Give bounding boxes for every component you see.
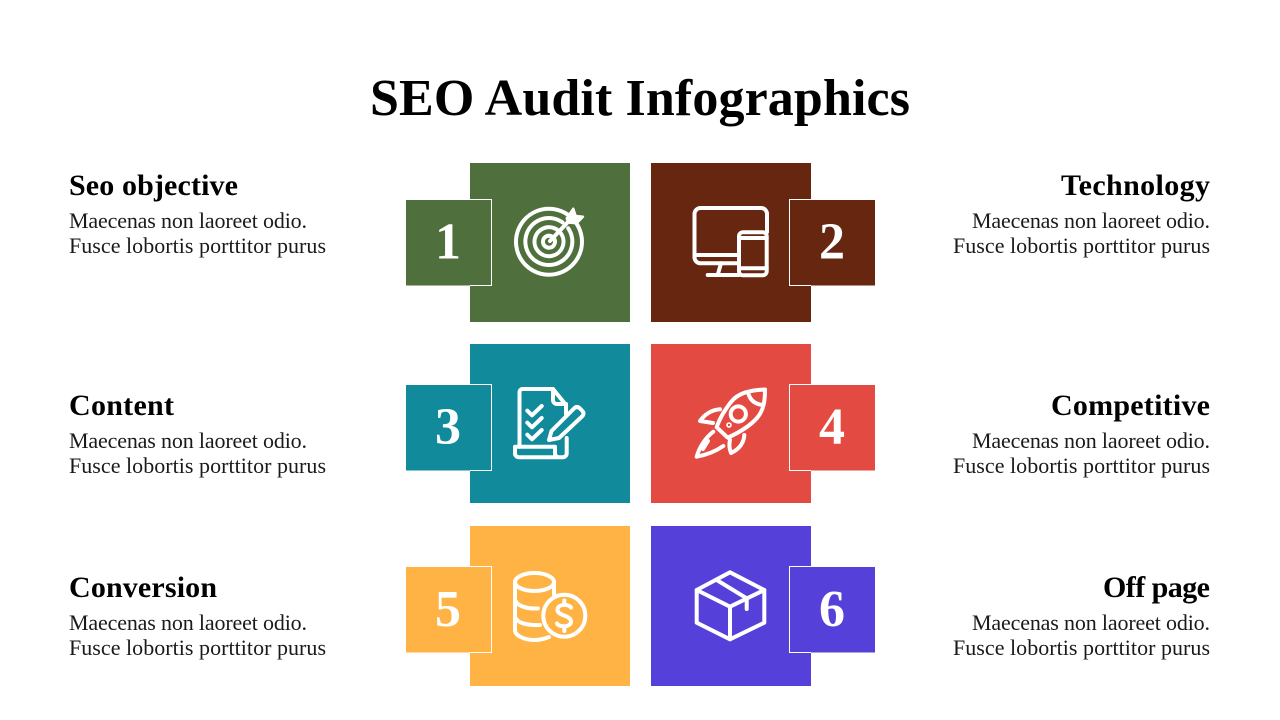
panel: 6 purple tile: [651, 526, 875, 686]
icon: package box: [697, 572, 764, 639]
text block: Off page: Fusce lobortis porttitor purus: [953, 635, 1210, 660]
text block: Off page: Maecenas non laoreet odio.: [972, 610, 1210, 635]
text block: Content: [69, 389, 326, 478]
icon: monitor and phone: [694, 208, 767, 275]
icon: coin stack with dollar: [515, 573, 585, 640]
text block: Content: Fusce lobortis porttitor purus: [69, 453, 326, 478]
text block: Content: Content: [69, 389, 174, 422]
text block: Content: Maecenas non laoreet odio.: [69, 428, 307, 453]
text block: Competitive: Maecenas non laoreet odio.: [972, 428, 1210, 453]
text block: Technology: Technology: [1061, 169, 1210, 202]
panel: 2 brown tile: 2: [819, 214, 845, 270]
text block: Conversion: Fusce lobortis porttitor purus: [69, 635, 326, 660]
panel: 3 teal tile: [406, 344, 630, 503]
text block: Seo objective: Maecenas non laoreet odio.: [69, 208, 307, 233]
panel: 1 green tile: 1: [435, 214, 461, 270]
title: SEO Audit Infographics: [370, 70, 910, 127]
text block: Conversion: [69, 571, 326, 660]
panel: 5 yellow tile: [406, 526, 630, 686]
text block: Seo objective: Seo objective: [69, 169, 238, 202]
text block: Conversion: Maecenas non laoreet odio.: [69, 610, 307, 635]
panel: 4 red tile: [651, 344, 875, 503]
icon: target with arrow: [516, 209, 583, 275]
text block: Seo objective: Fusce lobortis porttitor purus: [69, 233, 326, 258]
panel: 5 yellow tile: 5: [435, 581, 461, 638]
icon: checklist and pencil: [515, 389, 584, 457]
text block: Technology: Maecenas non laoreet odio.: [972, 208, 1210, 233]
icon: rocket: [697, 390, 765, 457]
panel: 1 green tile: [406, 163, 630, 322]
text block: Off page: [953, 571, 1210, 660]
panel: 3 teal tile: 3: [435, 398, 461, 456]
panel: 2 brown tile: [651, 163, 875, 322]
panel: 4 red tile: 4: [819, 398, 845, 456]
text block: Conversion: Conversion: [69, 571, 217, 604]
text block: Competitive: Competitive: [1051, 389, 1210, 422]
text block: Competitive: [953, 389, 1210, 478]
text block: Technology: Fusce lobortis porttitor purus: [953, 233, 1210, 258]
text block: Technology: [953, 169, 1210, 258]
panel: 6 purple tile: 6: [819, 581, 845, 638]
text block: Competitive: Fusce lobortis porttitor purus: [953, 453, 1210, 478]
text block: Seo objective: [69, 169, 326, 258]
text block: Off page: Off page: [1103, 571, 1210, 604]
